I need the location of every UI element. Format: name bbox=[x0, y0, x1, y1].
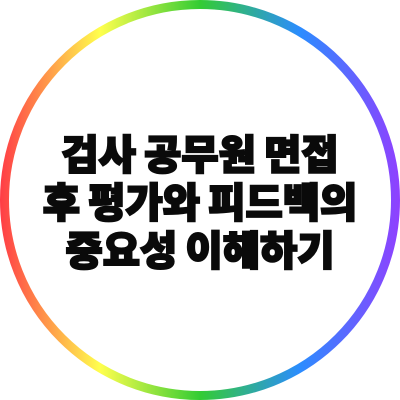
title: 검사 공무원 면접 bbox=[61, 132, 339, 178]
title bbox=[43, 132, 357, 274]
title: 중요성 이해하기 bbox=[65, 228, 335, 274]
title: 후 평가와 피드백의 bbox=[43, 180, 357, 226]
